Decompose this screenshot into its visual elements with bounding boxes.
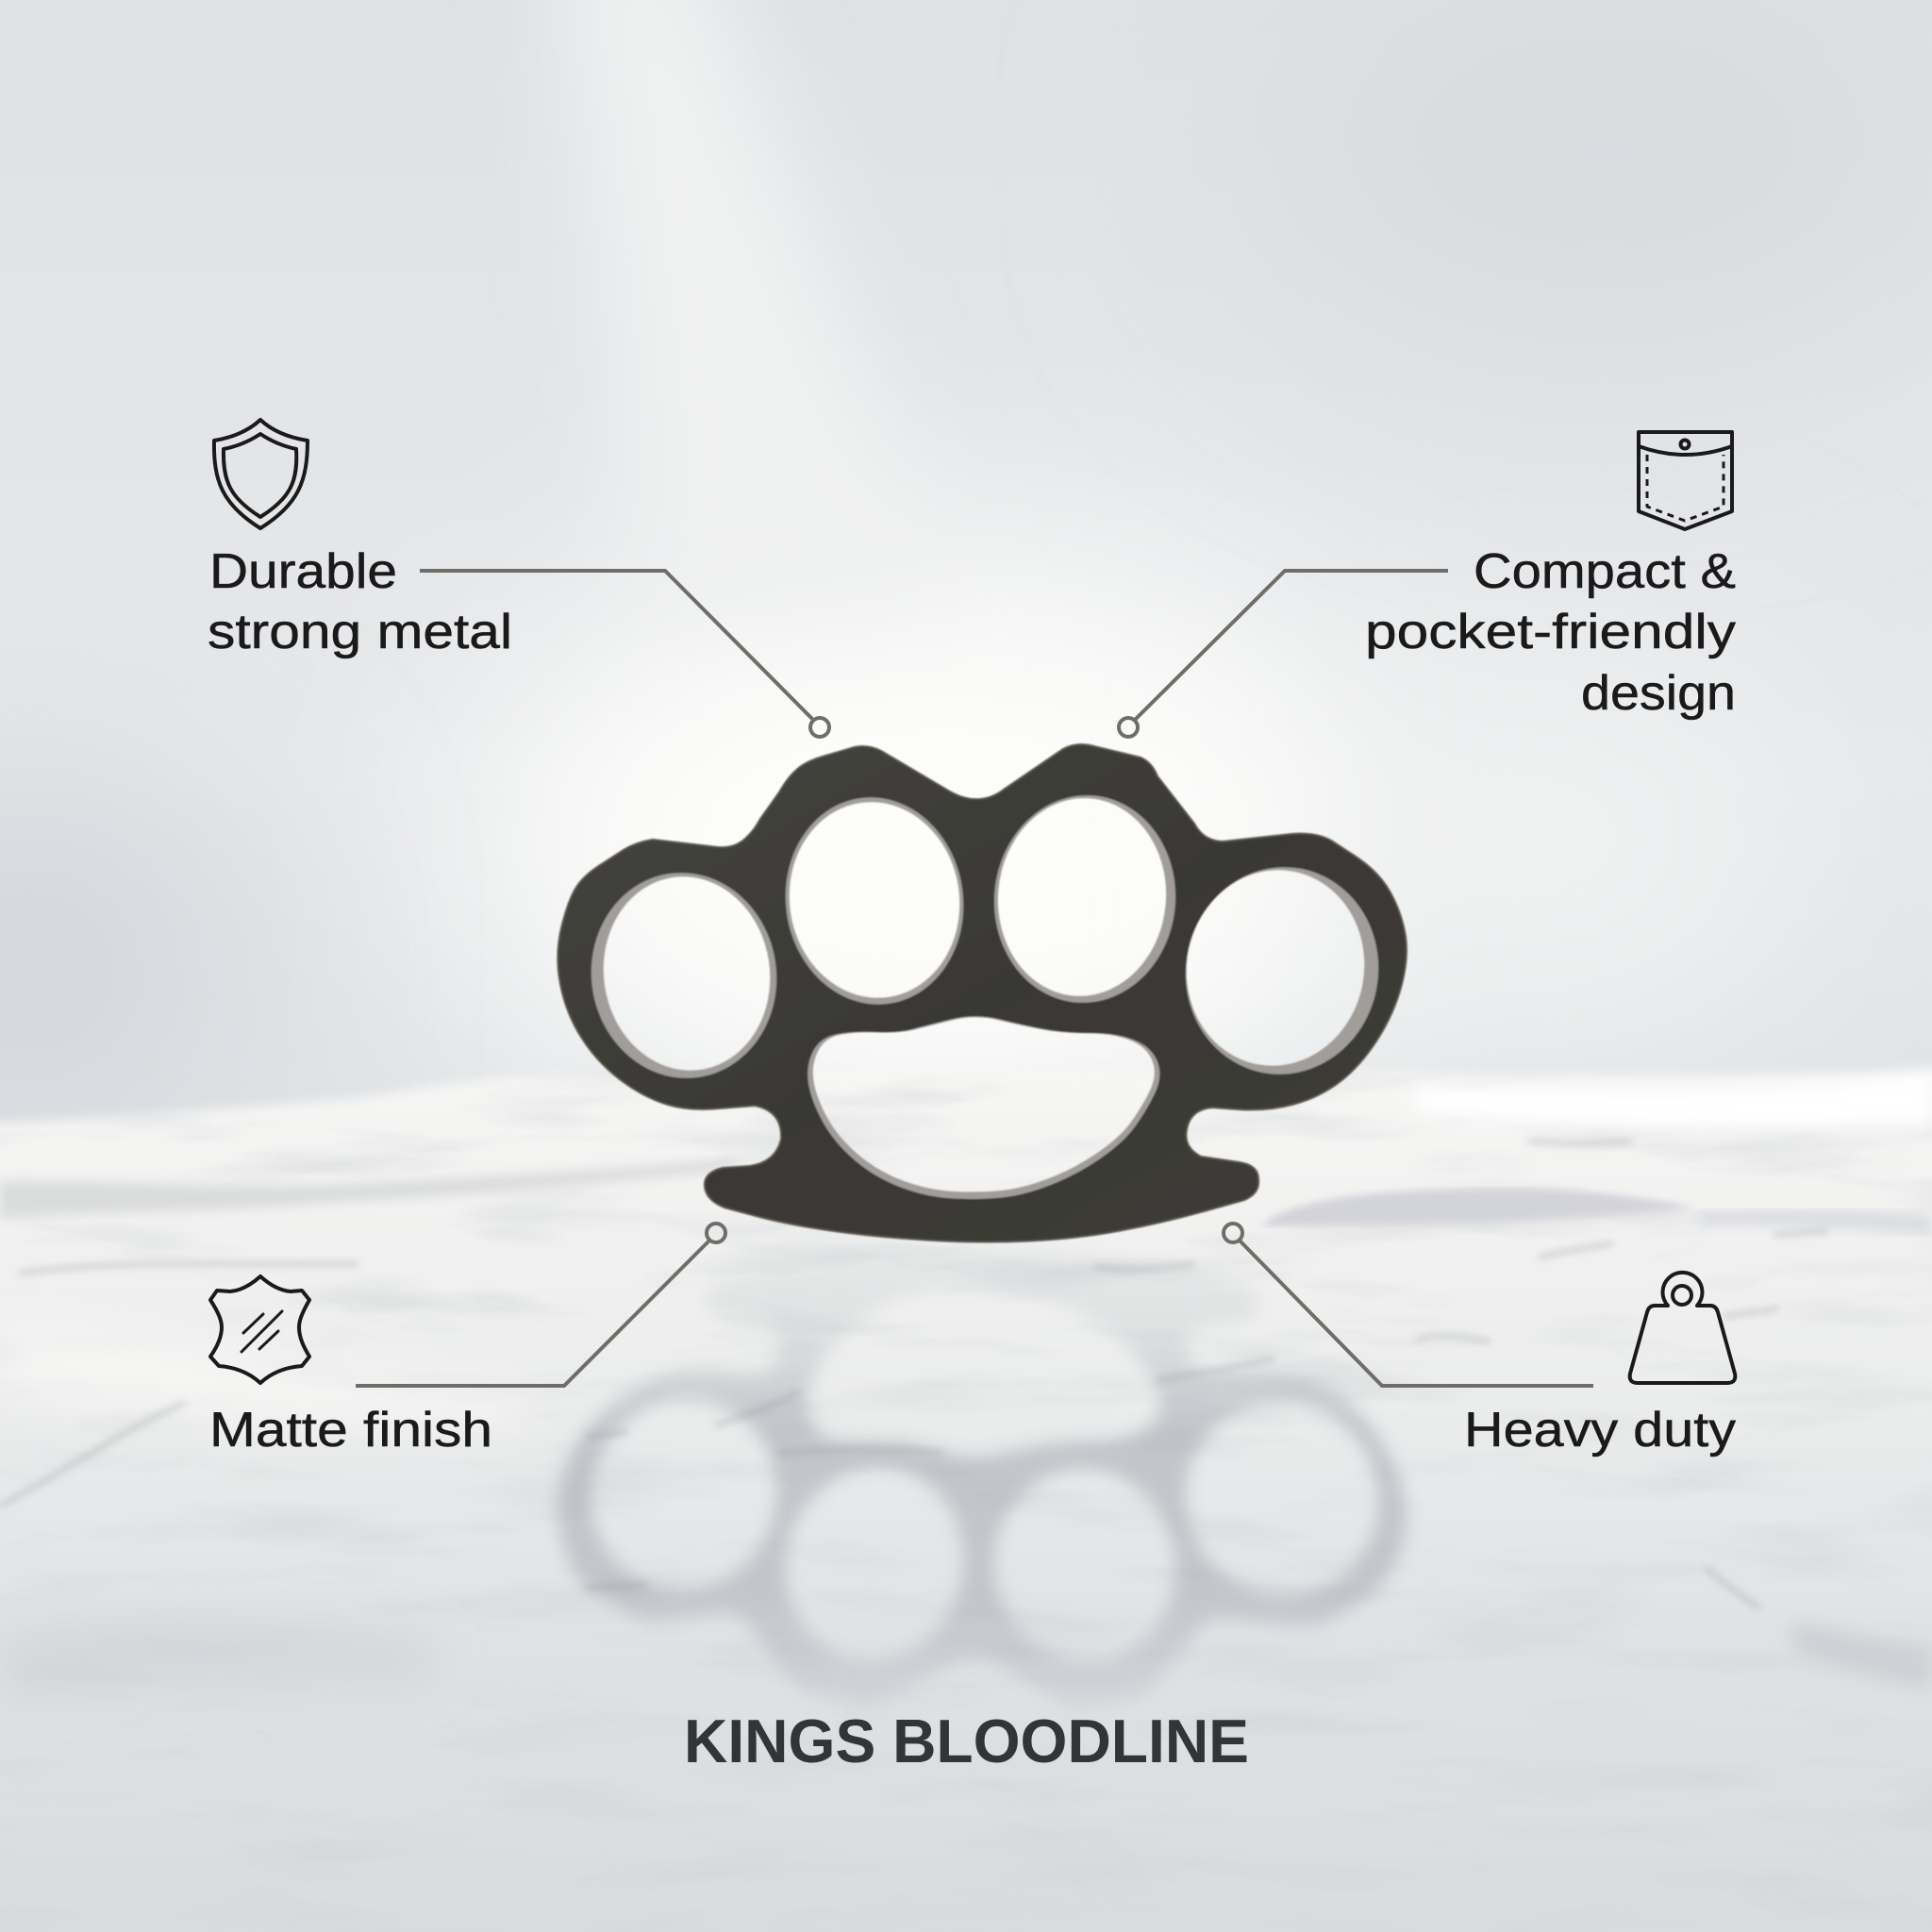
metal body <box>558 744 1407 1242</box>
background: studio wall <box>0 0 1932 1189</box>
icon: weight <box>1630 1273 1735 1383</box>
callout line: durable <box>420 571 829 737</box>
callout line: compact <box>1119 571 1448 737</box>
text: compact and pocket-friendly design: pocket-friendly <box>1365 605 1736 659</box>
callout line: heavy duty <box>1224 1224 1593 1386</box>
product reflection on marble <box>558 1246 1407 1709</box>
product: brass knuckles <box>558 744 1407 1242</box>
text: compact and pocket-friendly design: Compact & <box>1474 544 1736 599</box>
background: marble floor <box>0 1038 1932 1932</box>
callout line: matte finish <box>356 1224 725 1386</box>
icon: shield <box>214 420 308 528</box>
icon: pocket <box>1639 432 1732 529</box>
inner bevels of finger holes <box>577 785 1396 1199</box>
text: matte finish: Matte finish <box>209 1403 492 1457</box>
marble veins <box>0 1141 1828 1608</box>
text: durable strong metal: strong metal <box>208 605 512 659</box>
text: compact and pocket-friendly design <box>1365 544 1736 721</box>
text: compact and pocket-friendly design: design <box>1581 666 1736 721</box>
text: durable strong metal <box>208 544 512 659</box>
icon: leather hide <box>210 1276 309 1383</box>
text: heavy duty: Heavy duty <box>1464 1403 1736 1457</box>
text: durable strong metal: Durable <box>209 544 397 599</box>
brand title: KINGS BLOODLINE <box>684 1707 1249 1775</box>
